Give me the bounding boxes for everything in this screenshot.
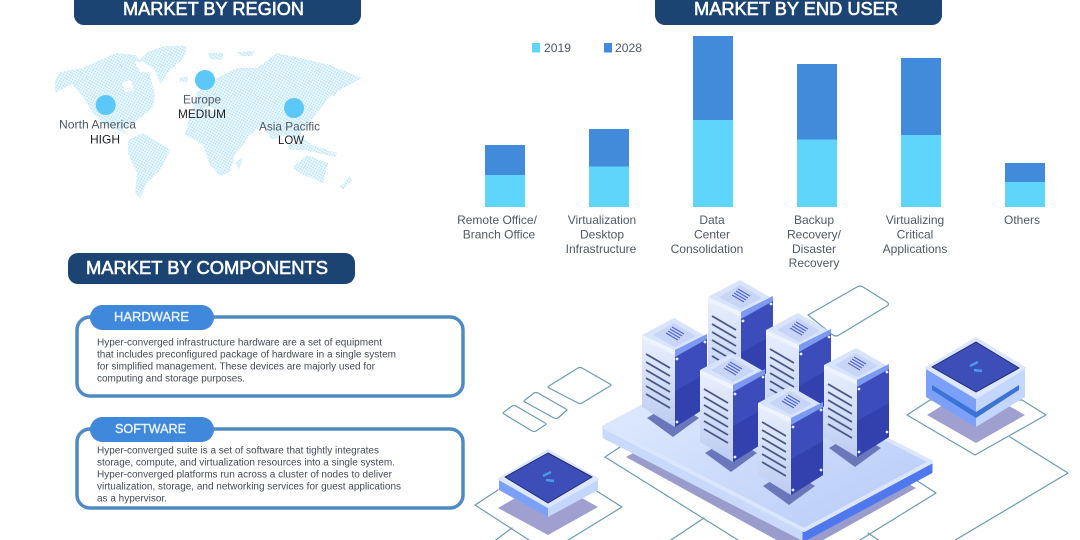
world map: [55, 46, 362, 198]
card: hardware: for simplified management. These devices are majorly used for: [97, 362, 376, 372]
card: hardware: computing and storage purposes.: [97, 374, 245, 384]
bar: data center: [693, 36, 733, 207]
platform with servers: [604, 280, 931, 540]
chart category labels: Backup: [794, 213, 834, 227]
chart category labels: Recovery/: [787, 228, 842, 242]
chart category labels: Remote Office/: [457, 213, 538, 227]
chart category labels: [457, 213, 1040, 270]
marker: north america: North America: [59, 118, 136, 132]
card: software: [77, 417, 463, 508]
server 1: [642, 318, 707, 437]
circuit outlines: [475, 286, 1068, 540]
chip: right: [926, 338, 1025, 443]
chart category labels: Virtualizing: [886, 213, 944, 227]
marker: asia pacific: [259, 98, 320, 147]
chart category labels: Critical: [897, 228, 933, 242]
marker: europe: Europe: [183, 92, 221, 106]
card: hardware: Hyper-converged infrastructure hardware are a set of equipment: [97, 338, 382, 348]
heading: market by region: [74, 0, 361, 25]
chip: left: [498, 450, 598, 535]
card: software: as a hypervisor.: [97, 494, 167, 504]
chart category labels: Data: [699, 213, 725, 227]
server 2: [708, 280, 773, 399]
card: software: SOFTWARE: [115, 421, 186, 436]
bar: backup recovery: [797, 64, 837, 207]
marker: asia pacific: LOW: [278, 133, 305, 147]
chart category labels: Disaster: [792, 242, 836, 256]
platform base: [604, 359, 931, 540]
bar: virtualization desktop: [589, 129, 629, 207]
marker: north america: [59, 95, 136, 146]
heading: market by end user: [655, 0, 942, 25]
heading: market by components: MARKET BY COMPONENTS: [86, 258, 328, 278]
bar: virtualizing critical: [901, 58, 941, 207]
marker: north america: HIGH: [90, 132, 120, 146]
server 5: [824, 348, 889, 467]
heading: market by components: [68, 253, 355, 284]
chart legend: [532, 41, 642, 55]
chart category labels: Recovery: [789, 256, 839, 270]
server 3: [766, 313, 831, 432]
chart category labels: Desktop: [580, 228, 624, 242]
stacked bar chart: [485, 36, 1045, 207]
chart legend: 2019: [544, 41, 571, 55]
card: hardware: [77, 305, 463, 396]
card: hardware: HARDWARE: [114, 309, 189, 324]
chart legend: 2028: [615, 41, 642, 55]
platform shadow: [626, 393, 916, 540]
chart category labels: Others: [1004, 213, 1040, 227]
card: hardware: that includes preconfigured package of hardware in a single system: [97, 350, 396, 360]
bar: remote office: [485, 145, 525, 207]
marker: europe: [178, 70, 226, 121]
chart category labels: Center: [694, 228, 730, 242]
server 6: [758, 386, 823, 505]
marker: asia pacific: Asia Pacific: [259, 120, 320, 134]
card: software: Hyper-converged platforms run across a cluster of nodes to deliver: [97, 470, 393, 480]
chart category labels: Branch Office: [463, 228, 536, 242]
chart category labels: Consolidation: [671, 242, 743, 256]
card: software: storage, compute, and virtualization resources into a single system.: [97, 458, 395, 468]
marker: europe: MEDIUM: [178, 107, 226, 121]
card: software: virtualization, storage, and networking services for guest applications: [97, 482, 401, 492]
card: software: Hyper-converged suite is a set of software that tightly integrates: [97, 446, 379, 456]
chart category labels: Infrastructure: [566, 242, 637, 256]
server 4: [700, 353, 765, 472]
chart category labels: Applications: [883, 242, 947, 256]
bar: others: [1005, 163, 1045, 207]
chart category labels: Virtualization: [568, 213, 636, 227]
